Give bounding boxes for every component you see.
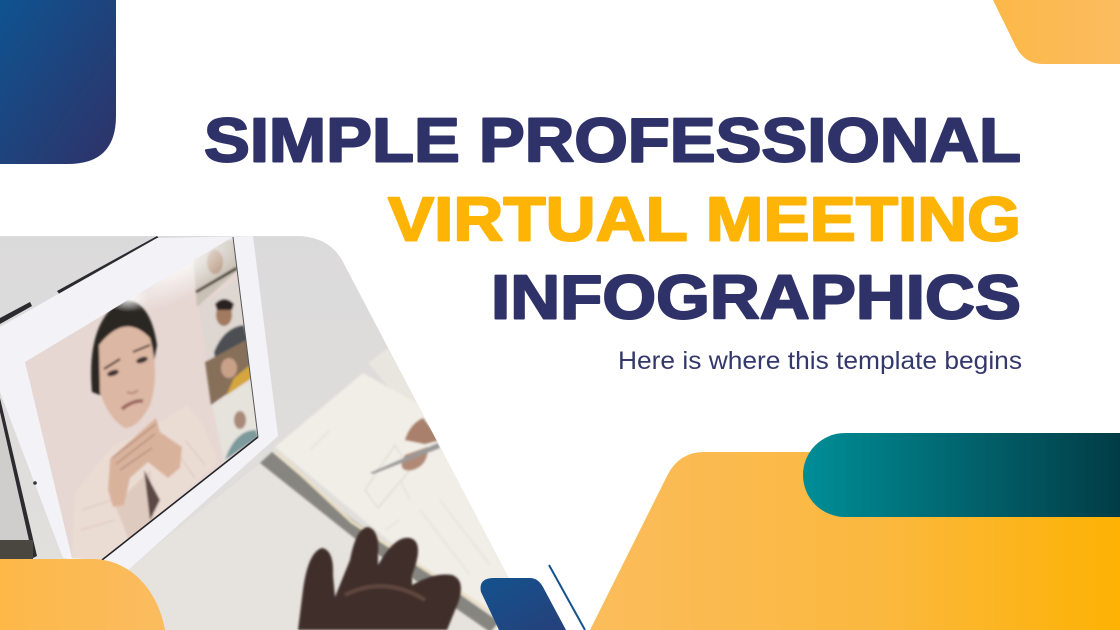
subtitle: Here is where this template begins bbox=[618, 347, 1022, 375]
thumbnails bbox=[192, 240, 238, 307]
title line 2: VIRTUAL MEETING bbox=[388, 186, 1021, 254]
hair bbox=[91, 300, 157, 395]
photo: woman on tablet video call and hands writing in notebook bbox=[0, 236, 509, 630]
tablet bbox=[0, 236, 278, 570]
screen glare bbox=[117, 238, 235, 311]
shape: bottom blue parallelogram bbox=[481, 578, 566, 630]
accent line bbox=[549, 565, 585, 630]
writing hand and pen bbox=[370, 418, 440, 474]
hands bbox=[108, 418, 182, 507]
shape: bottom-left orange semicircle bbox=[0, 559, 165, 630]
shirt bbox=[76, 470, 161, 559]
table surface bbox=[120, 462, 490, 630]
title line 3: INFOGRAPHICS bbox=[491, 264, 1021, 332]
shape: top-left blue corner bbox=[0, 0, 116, 164]
title line 1: SIMPLE PROFESSIONAL bbox=[204, 106, 1021, 176]
shape: bottom-right orange panel bbox=[590, 452, 1120, 630]
shape: teal pill bbox=[803, 433, 1120, 517]
face bbox=[99, 327, 155, 428]
eyes, nose and lips bbox=[104, 345, 150, 369]
notebook bbox=[260, 349, 508, 630]
shape: top-right orange corner bbox=[993, 0, 1120, 64]
video call screen bbox=[25, 238, 258, 560]
title bbox=[204, 106, 1021, 332]
hand on notebook bbox=[298, 527, 461, 630]
